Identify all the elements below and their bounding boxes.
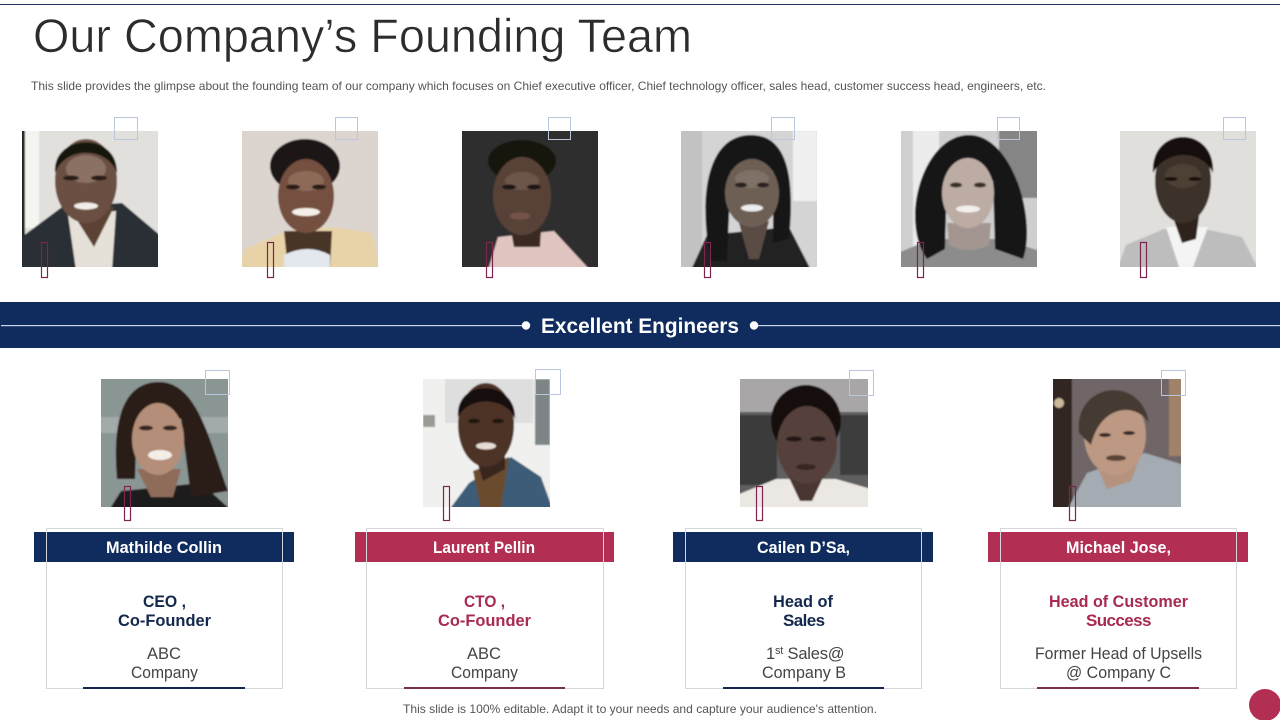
company [451, 645, 519, 682]
company: @ Company C [1066, 664, 1171, 682]
name bar: Mathilde Collin [106, 538, 222, 557]
card outline [1000, 528, 1236, 688]
company: ABC [147, 645, 181, 663]
company: Sales@ [783, 645, 844, 663]
role: Success [1086, 611, 1151, 630]
title: Our Company’s Founding Team [33, 9, 692, 62]
role [1049, 592, 1188, 630]
accent squares and bars: engineers [42, 118, 1246, 278]
panel: Mathilde Collin [34, 370, 294, 689]
company: Company [131, 664, 199, 682]
banner: Excellent Engineers [0, 302, 1280, 348]
card outline [366, 528, 604, 688]
portrait: Cailen D'Sa [740, 379, 868, 507]
accent marks [444, 370, 560, 520]
panel: Cailen D'Sa [673, 370, 933, 689]
name bar [673, 532, 933, 562]
accent marks [1070, 370, 1186, 520]
name bar [988, 532, 1248, 562]
accent marks [756, 370, 874, 520]
panel: Laurent Pellin [355, 370, 614, 689]
role [438, 592, 531, 630]
role: CTO , [464, 592, 505, 611]
company: st [775, 645, 783, 657]
company: Company [451, 664, 519, 682]
role: Head of Customer [1049, 592, 1188, 611]
portrait: engineer 1 [22, 131, 158, 267]
role [118, 592, 211, 630]
company [762, 645, 846, 682]
name bar: Cailen D’Sa, [757, 538, 850, 557]
company: Former Head of Upsells [1035, 645, 1202, 663]
name bar: Laurent Pellin [433, 538, 535, 557]
portrait: engineer 2 [242, 131, 378, 267]
company: 1 [766, 645, 775, 663]
banner: Excellent Engineers: Excellent Engineers [541, 315, 739, 338]
panel: Michael Jose [988, 370, 1248, 689]
subtitle: This slide provides the glimpse about the founding team of our company which focuses on Chief executive officer, Chief technology officer, sales head, customer success head, engineers, etc. [31, 79, 1046, 93]
role: Sales [783, 611, 825, 630]
card outline [686, 528, 922, 688]
name bar [34, 532, 294, 562]
name bar: Michael Jose, [1066, 538, 1171, 557]
name bar [355, 532, 614, 562]
role: CEO , [143, 592, 186, 611]
company: ABC [467, 645, 501, 663]
portrait: Michael Jose [1053, 379, 1181, 507]
role: Head of [773, 592, 833, 611]
portrait: Laurent Pellin [423, 379, 550, 507]
company: Company B [762, 664, 846, 682]
portrait: engineer 3 [462, 131, 598, 267]
company [131, 645, 199, 682]
company [1035, 645, 1202, 682]
role: Co-Founder [118, 611, 211, 630]
role: Co-Founder [438, 611, 531, 630]
page marker circle [1249, 689, 1280, 720]
role [773, 592, 833, 630]
photo row: engineers [19, 118, 1259, 278]
footer note: This slide is 100% editable. Adapt it to your needs and capture your audience's attention. [403, 702, 877, 716]
accent marks [124, 370, 230, 520]
card outline [46, 528, 282, 688]
portrait: engineer 5 [901, 131, 1037, 267]
portrait: engineer 4 [681, 131, 817, 267]
portrait: engineer 6 [1120, 131, 1256, 267]
portrait: Mathilde Collin [101, 379, 228, 507]
